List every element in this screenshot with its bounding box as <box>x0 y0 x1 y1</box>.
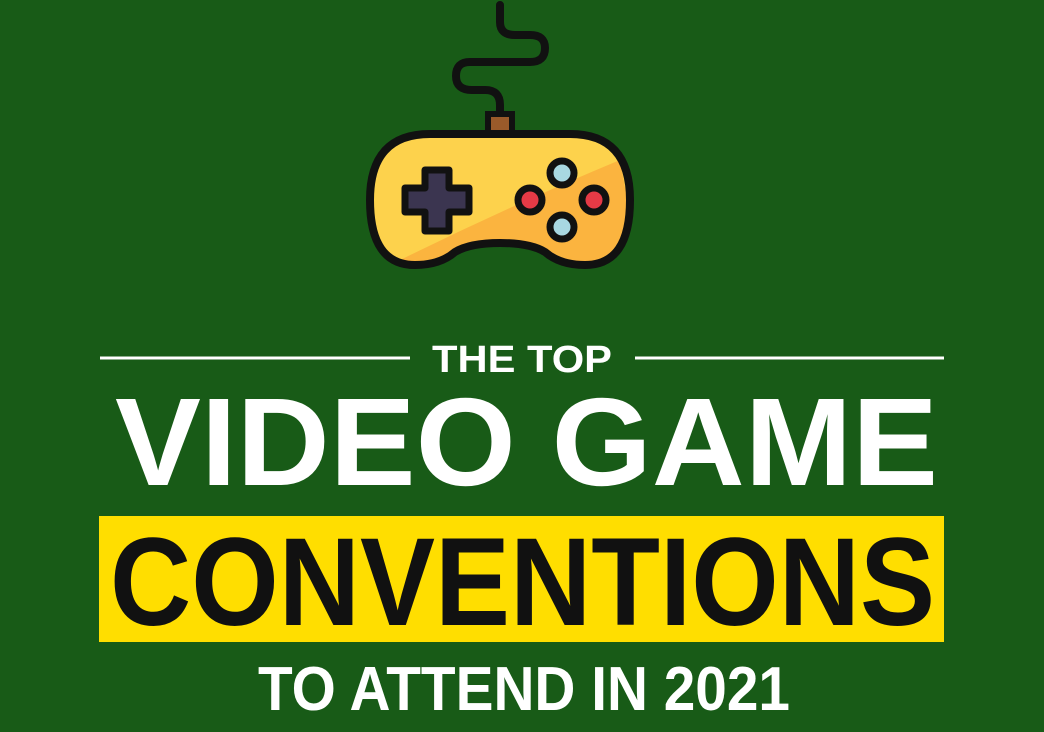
icon: game controller <box>370 5 640 270</box>
highlight: conventions: CONVENTIONS <box>110 513 935 652</box>
title: video game: VIDEO GAME <box>115 373 938 512</box>
connector <box>488 114 512 133</box>
heading: the top: THE TOP <box>432 339 612 381</box>
cable <box>456 5 545 118</box>
subtitle: TO ATTEND IN 2021 <box>258 655 790 724</box>
controller body <box>370 134 640 270</box>
buttons <box>518 161 606 239</box>
d-pad <box>405 170 469 231</box>
